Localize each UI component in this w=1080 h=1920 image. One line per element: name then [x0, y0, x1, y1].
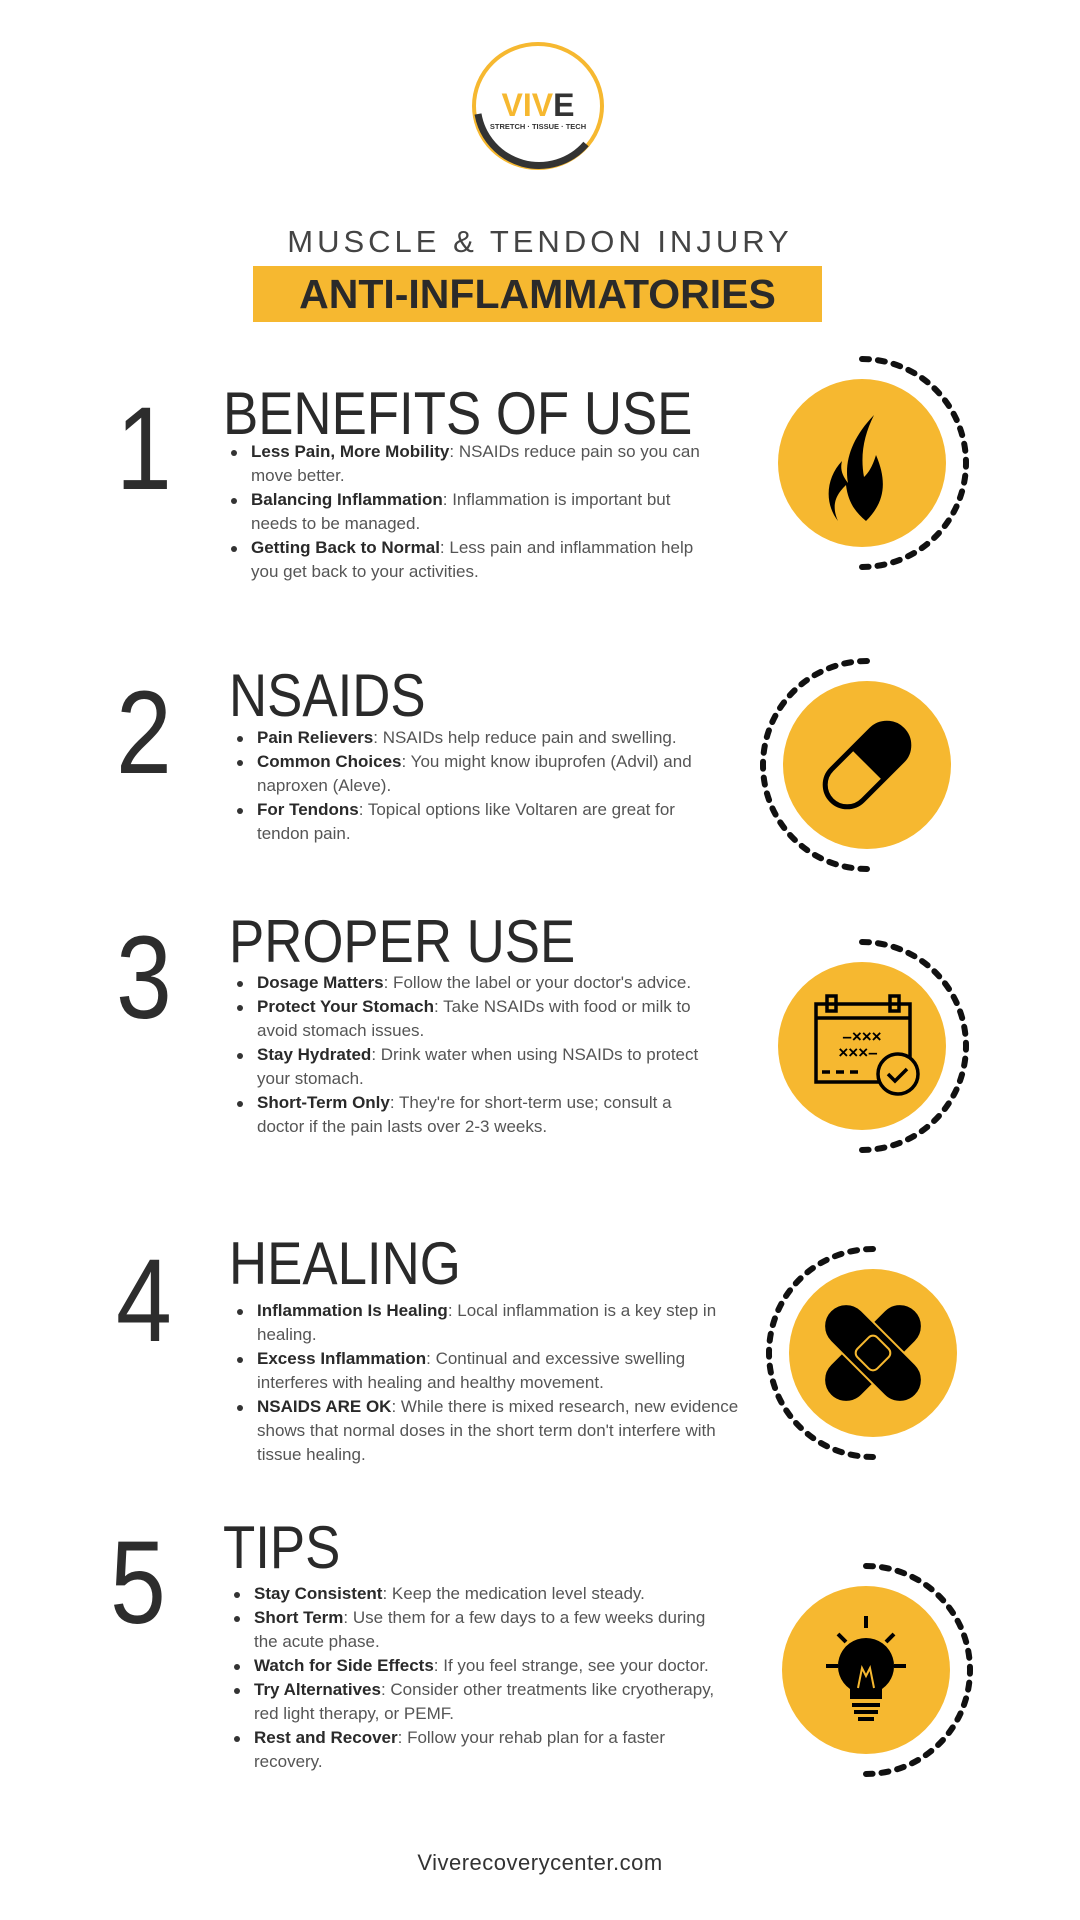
- number 4: 4: [116, 1235, 172, 1367]
- bullets 4: Inflammation Is Healing: Local inflammation is a key step in: [257, 1301, 716, 1320]
- bullets 5: Stay Consistent: Keep the medication level steady.: [254, 1584, 645, 1603]
- bullets 2: [237, 728, 692, 843]
- icon: pill: [760, 658, 951, 872]
- section 3: [116, 908, 698, 1136]
- footer: Viverecoverycenter.com: [417, 1850, 663, 1875]
- bullets 2: tendon pain.: [257, 824, 351, 843]
- bullets 1: move better.: [251, 466, 345, 485]
- section 1: [116, 380, 700, 581]
- bullets 1: you get back to your activities.: [251, 562, 479, 581]
- bullets 4: Excess Inflammation: Continual and excessive swelling: [257, 1349, 685, 1368]
- logo: [472, 42, 604, 170]
- bullets 4: interferes with healing and healthy movement.: [257, 1373, 604, 1392]
- bullets 5: [234, 1584, 714, 1771]
- bullets 4: shows that normal doses in the short term don't interfere with: [257, 1421, 716, 1440]
- logo: STRETCH · TISSUE · TECH: [490, 122, 586, 131]
- heading 4: HEALING: [229, 1230, 461, 1297]
- section 2: [116, 662, 692, 843]
- icon: calendar: [778, 939, 969, 1153]
- title banner: [253, 266, 822, 322]
- number 2: 2: [116, 667, 172, 799]
- bullets 1: Getting Back to Normal: Less pain and inflammation help: [251, 538, 693, 557]
- bullets 1: Less Pain, More Mobility: NSAIDs reduce pain so you can: [251, 442, 700, 461]
- bullets 5: red light therapy, or PEMF.: [254, 1704, 454, 1723]
- bullets 5: Short Term: Use them for a few days to a few weeks during: [254, 1608, 705, 1627]
- bullets 1: Balancing Inflammation: Inflammation is important but: [251, 490, 670, 509]
- number 5: 5: [110, 1517, 166, 1649]
- number 1: 1: [116, 383, 172, 515]
- bullets 1: needs to be managed.: [251, 514, 420, 533]
- number 3: 3: [116, 912, 172, 1044]
- bullets 2: Common Choices: You might know ibuprofen (Advil) and: [257, 752, 692, 771]
- title banner: ANTI-INFLAMMATORIES: [299, 271, 776, 317]
- icon: bandage: [766, 1246, 957, 1460]
- section 5: [110, 1514, 714, 1771]
- bullets 3: Short-Term Only: They're for short-term use; consult a: [257, 1093, 672, 1112]
- bullets 5: the acute phase.: [254, 1632, 380, 1651]
- logo: VIVE: [502, 87, 574, 123]
- bullets 5: recovery.: [254, 1752, 323, 1771]
- heading 5: TIPS: [223, 1514, 340, 1581]
- icon: flame: [778, 356, 969, 570]
- bullets 3: avoid stomach issues.: [257, 1021, 424, 1040]
- bullets 3: Dosage Matters: Follow the label or your doctor's advice.: [257, 973, 691, 992]
- bullets 3: Protect Your Stomach: Take NSAIDs with food or milk to: [257, 997, 691, 1016]
- bullets 5: Watch for Side Effects: If you feel strange, see your doctor.: [254, 1656, 709, 1675]
- bullets 3: doctor if the pain lasts over 2-3 weeks.: [257, 1117, 547, 1136]
- bullets 4: healing.: [257, 1325, 317, 1344]
- icon: calendar: –×××: [842, 1027, 882, 1046]
- subtitle: MUSCLE & TENDON INJURY: [287, 224, 793, 259]
- bullets 2: Pain Relievers: NSAIDs help reduce pain and swelling.: [257, 728, 677, 747]
- bullets 3: [237, 973, 698, 1136]
- bullets 5: Try Alternatives: Consider other treatments like cryotherapy,: [254, 1680, 714, 1699]
- bullets 4: NSAIDS ARE OK: While there is mixed research, new evidence: [257, 1397, 738, 1416]
- icon: calendar: ×××–: [838, 1043, 878, 1062]
- bullets 1: [231, 442, 700, 581]
- bullets 5: Rest and Recover: Follow your rehab plan for a faster: [254, 1728, 665, 1747]
- bullets 3: your stomach.: [257, 1069, 364, 1088]
- heading 3: PROPER USE: [229, 908, 575, 975]
- section 4: [116, 1230, 738, 1464]
- heading 2: NSAIDS: [229, 662, 426, 729]
- icon: light bulb: [782, 1563, 973, 1777]
- bullets 2: For Tendons: Topical options like Voltaren are great for: [257, 800, 675, 819]
- heading 1: BENEFITS OF USE: [223, 380, 692, 447]
- bullets 4: [237, 1301, 738, 1464]
- bullets 3: Stay Hydrated: Drink water when using NSAIDs to protect: [257, 1045, 698, 1064]
- bullets 4: tissue healing.: [257, 1445, 366, 1464]
- bullets 2: naproxen (Aleve).: [257, 776, 391, 795]
